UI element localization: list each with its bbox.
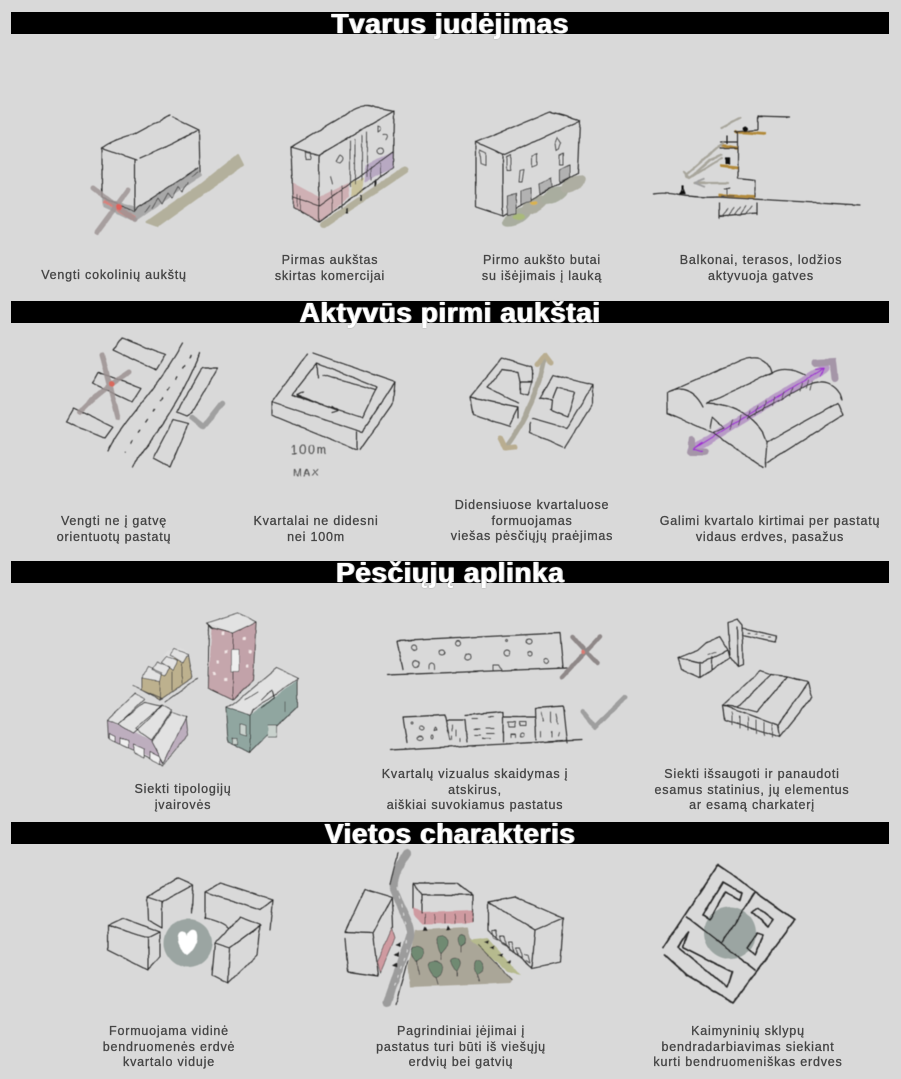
caption: Vengti cokolinių aukštų <box>41 268 187 282</box>
icon: block 100m max: MAX <box>293 467 319 479</box>
caption: pastatus turi būti iš viešųjų <box>376 1040 546 1054</box>
caption: Vengti ne į gatvę <box>61 514 167 528</box>
caption: Kvartalai ne didesni <box>253 514 379 528</box>
caption: esamus statinius, jų elementus <box>655 782 849 796</box>
caption: Siekti išsaugoti ir panaudoti <box>664 767 840 781</box>
caption <box>134 782 231 812</box>
caption <box>103 1024 235 1069</box>
caption: įvairovės <box>155 798 211 812</box>
caption <box>660 514 880 544</box>
caption <box>482 253 602 283</box>
caption: erdvių bei gatvių <box>409 1055 513 1069</box>
heading: Pėsčiųjų aplinka <box>11 561 889 583</box>
caption <box>253 514 379 544</box>
heading: Tvarus judėjimas: Tvarus judėjimas <box>331 8 569 39</box>
caption: Formuojama vidinė <box>109 1024 229 1038</box>
heading: Tvarus judėjimas <box>11 12 889 34</box>
caption: viešas pėsčiųjų praėjimas <box>451 529 613 543</box>
handwritten label: 100m <box>291 443 327 457</box>
caption: kurti bendruomeniškas erdves <box>653 1055 843 1069</box>
heading: Pėsčiųjų aplinka: Pėsčiųjų aplinka <box>336 557 564 588</box>
caption <box>653 1024 843 1069</box>
icon: pedestrian passage between blocks <box>470 355 593 448</box>
caption <box>680 253 842 283</box>
caption: vidaus erdves, pasažus <box>696 530 844 544</box>
icon: plinth building with cross <box>93 115 243 232</box>
caption: ar esamą charkaterį <box>689 798 815 812</box>
icon: block divided into separate buildings <box>390 697 625 750</box>
heading: Aktyvūs pirmi aukštai: Aktyvūs pirmi aukštai <box>300 297 600 328</box>
caption: Pagrindiniai įėjimai į <box>397 1024 525 1038</box>
caption: skirtas komercijai <box>275 268 385 282</box>
sub-icon: yellow houses <box>133 648 198 702</box>
sub-icon: lilac sawtooth factory <box>107 694 188 765</box>
caption: Siekti tipologijų <box>135 782 231 796</box>
icon: block 100m max <box>272 353 395 479</box>
icon: preserved industrial buildings <box>678 619 812 737</box>
icon: balconies section <box>653 116 860 218</box>
icon: monolithic block crossed <box>387 633 600 677</box>
caption: formuojamas <box>491 514 573 528</box>
caption: Galimi kvartalo kirtimai per pastatų <box>660 514 880 528</box>
icon: site plan with entrances <box>345 853 563 1005</box>
icon: passage through vault building <box>667 358 843 467</box>
caption <box>450 498 613 543</box>
caption: su išėjimais į lauką <box>482 268 602 282</box>
caption <box>376 1024 546 1069</box>
icon: blocks not facing street <box>66 338 222 467</box>
caption: atskirus, <box>448 782 502 796</box>
heading: Vietos charakteris: Vietos charakteris <box>325 818 575 849</box>
icon: ground-floor apartments with exits <box>476 112 589 231</box>
caption <box>57 514 171 544</box>
icon: neighbouring plots community space <box>663 865 795 1003</box>
caption: Balkonai, terasos, lodžios <box>680 253 842 267</box>
caption <box>654 767 849 812</box>
caption: aiškiai suvokiamus pastatus <box>387 798 563 812</box>
caption <box>275 253 385 283</box>
icon: typology variety <box>107 613 298 765</box>
caption: nei 100m <box>287 530 345 544</box>
heading: Aktyvūs pirmi aukštai <box>11 301 889 323</box>
caption: Didensiuose kvartaluose <box>455 498 609 512</box>
heading: Vietos charakteris <box>11 822 889 844</box>
icon: community space heart <box>108 878 273 983</box>
caption: Kaimyninių sklypų <box>691 1024 805 1038</box>
caption: bendradarbiavimas siekiant <box>662 1040 834 1054</box>
caption: orientuotų pastatų <box>57 530 171 544</box>
icon: ground-floor commerce building <box>291 106 405 225</box>
caption: bendruomenės erdvė <box>103 1040 235 1054</box>
caption: Pirmas aukštas <box>282 253 378 267</box>
caption <box>382 767 568 812</box>
caption: aktyvuoja gatves <box>708 268 814 282</box>
caption: Pirmo aukšto butai <box>483 253 601 267</box>
caption: Kvartalų vizualus skaidymas į <box>382 767 568 781</box>
sub-icon: teal building <box>226 668 298 752</box>
caption: kvartalo viduje <box>123 1055 215 1069</box>
